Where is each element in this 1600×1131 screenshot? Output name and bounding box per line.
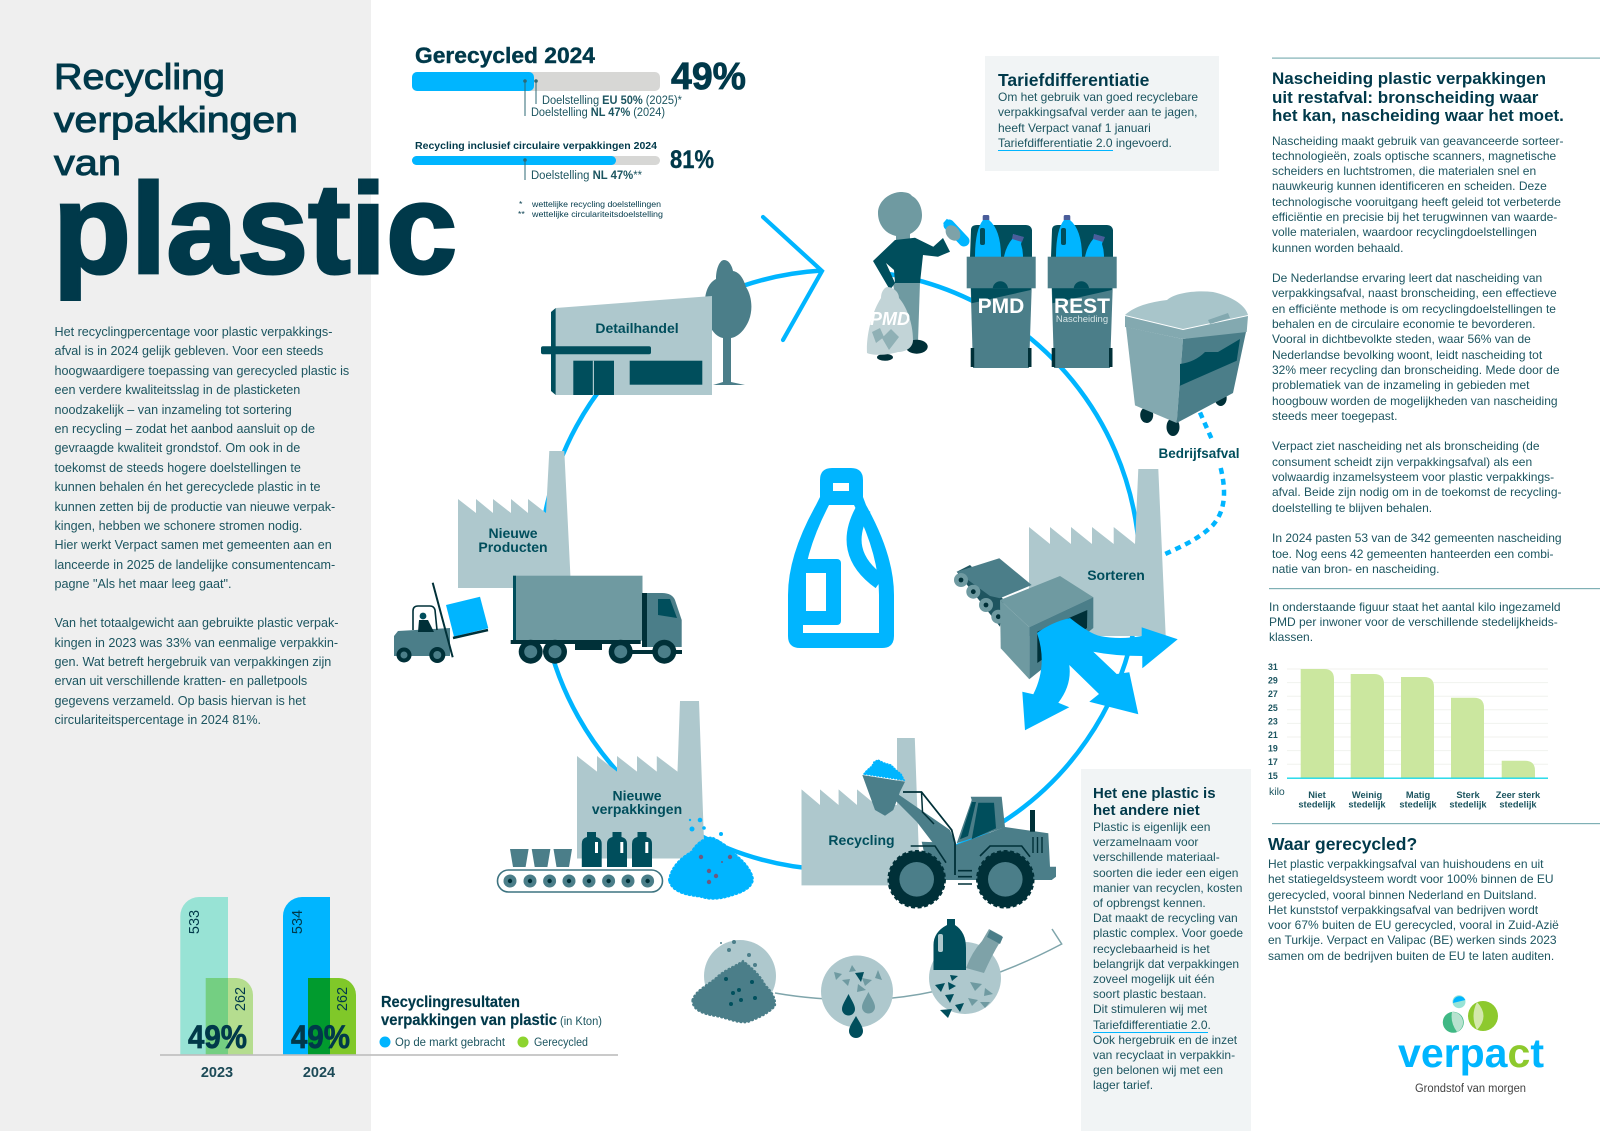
text block: nascheiding: scheiders en luchtstromen, die materialen snel en xyxy=(1272,164,1536,178)
chart: PMD per inwoner: 23 xyxy=(1268,716,1278,726)
text block: intro left column: kunnen zetten bij de productie van nieuwe verpak- xyxy=(54,500,335,514)
illustration: sorteren factory: Sorteren xyxy=(1087,567,1145,583)
illustration: conveyor with packaging xyxy=(498,832,662,892)
text block: het ene plastic: Dat maakt de recycling van xyxy=(1093,911,1238,925)
gauge: gerecycled 2024: 49% xyxy=(671,56,746,98)
footnotes: wettelijke recycling doelstellingen xyxy=(531,199,661,209)
text block: nascheiding: verpakkingsafval, naast bronscheiding, een effectieve xyxy=(1272,286,1557,300)
text block: het ene plastic: verschillende materiaal- xyxy=(1093,850,1220,864)
icon: central bottle xyxy=(788,468,894,648)
bottle in hand xyxy=(945,221,951,226)
text block: nascheiding: behalen en de circulaire economie te bevorderen. xyxy=(1272,317,1536,331)
title: Recycling xyxy=(54,56,225,97)
heading: waar gerecycled: Waar gerecycled? xyxy=(1268,834,1417,854)
text block: tariefdifferentiatie: heeft Verpact vanaf 1 januari xyxy=(998,121,1151,135)
text block: nascheiding: technologische vooruitgang heeft geleid tot verbeterde xyxy=(1272,195,1561,209)
label: bedrijfsafval: Bedrijfsafval xyxy=(1158,446,1240,461)
chart title and legend: Recyclingresultaten xyxy=(381,994,520,1011)
text block: intro left column: Het recyclingpercentage voor plastic verpakkings- xyxy=(54,325,332,339)
recycling loop ring xyxy=(540,270,1140,870)
illustration: REST bin xyxy=(1048,215,1117,368)
illustration: company container xyxy=(1125,291,1248,436)
chart: PMD per inwoner: Matig xyxy=(1406,790,1430,800)
text block: nascheiding: en efficiënte methode is om recyclingdoelstellingen te xyxy=(1272,302,1556,316)
text block: nascheiding: Nederlandse bevolking woont, leidt nascheiding tot xyxy=(1272,348,1542,362)
chart: PMD per inwoner: 19 xyxy=(1268,744,1278,754)
text block: figuur intro: PMD per inwoner voor de verschillende stedelijkheids- xyxy=(1269,615,1558,629)
title xyxy=(53,56,457,301)
text block: het ene plastic: lager tarief. xyxy=(1093,1078,1153,1092)
gauge: recycling inclusief circulaire verpakkingen xyxy=(412,140,714,182)
person legs xyxy=(893,282,920,346)
text block: het ene plastic: Tariefdifferentiatie 2.0. xyxy=(1093,1018,1211,1032)
text block: het ene plastic: soorten die ieder een eigen xyxy=(1093,866,1238,880)
text block: nascheiding: Vooral in dichtbevolkte steden, waar 56% van de xyxy=(1272,332,1531,346)
text block: tariefdifferentiatie xyxy=(998,90,1198,151)
text block: nascheiding: 32% meer recycling dan bronscheiding. Mede door de xyxy=(1272,363,1560,377)
text block: intro left column: een verdere kwaliteitsslag in de plasticketen xyxy=(54,383,300,397)
illustration: REST bin: Nascheiding xyxy=(1056,314,1108,325)
illustration: forklift xyxy=(394,583,488,663)
chart: recycling results bars: 2024 xyxy=(303,1065,335,1081)
text block: nascheiding xyxy=(1272,134,1564,576)
text block: nascheiding: hoogbouw worden de mogelijkheden van nascheiding xyxy=(1272,394,1558,408)
loader bucket xyxy=(862,775,905,816)
chart: PMD per inwoner: 25 xyxy=(1268,703,1278,713)
text block: nascheiding: problematiek van de inzameling in gebieden met xyxy=(1272,378,1530,392)
rule: right column middle xyxy=(1269,588,1600,589)
logo: verpact: Grondstof van morgen xyxy=(1415,1083,1526,1095)
chart: PMD per inwoner: Weinig xyxy=(1352,790,1382,800)
heading: nascheiding: uit restafval: bronscheiding waar xyxy=(1272,88,1538,106)
gauge: recycling inclusief circulaire verpakkingen: 81% xyxy=(670,146,714,174)
chart: recycling results bars: 533 xyxy=(187,910,203,934)
text block: nascheiding: Verpact ziet nascheiding net als bronscheiding (de xyxy=(1272,439,1540,453)
gauge: gerecycled 2024: Doelstelling NL 47% (2024) xyxy=(531,107,665,119)
chart: PMD per inwoner: stedelijk xyxy=(1499,800,1537,810)
text block: tariefdifferentiatie: Om het gebruik van goed recyclebare xyxy=(998,90,1198,104)
illustration: nieuwe verpakkingen factory: verpakkingen xyxy=(592,801,682,817)
text block: nascheiding: volwaardig inzamelsysteem voor plastic verpakkings- xyxy=(1272,470,1554,484)
text block: intro left column: ervan uit verschillende kratten- en palletpools xyxy=(54,674,307,688)
arrow: dashed bedrijfsafval line xyxy=(1163,412,1224,555)
chart: recycling results bars: 49% xyxy=(291,1019,350,1055)
chart: PMD per inwoner: stedelijk xyxy=(1298,800,1336,810)
chart: PMD per inwoner: Zeer sterk xyxy=(1496,790,1541,800)
heading: het ene plastic: Het ene plastic is xyxy=(1093,785,1216,802)
text block: nascheiding: technologieën, zoals optische scanners, magnetische xyxy=(1272,149,1556,163)
loader wheels xyxy=(889,851,945,907)
illustration: PMD bin xyxy=(967,215,1036,368)
text block: nascheiding: De Nederlandse ervaring leert dat nascheiding van xyxy=(1272,271,1542,285)
text block: het ene plastic: zoveel mogelijk uit één xyxy=(1093,972,1214,986)
chart: PMD per inwoner xyxy=(1268,662,1548,810)
text block: tariefdifferentiatie: verpakkingsafval verder aan te jagen, xyxy=(998,105,1197,119)
illustration: person with bag: PMD xyxy=(870,309,910,329)
heading: nascheiding: het kan, nascheiding waar het moet. xyxy=(1272,106,1564,125)
text block: intro left column: gegevens verzameld. Op basis hiervan is het xyxy=(54,694,306,708)
chart: recycling results bars xyxy=(160,897,618,1081)
chart: PMD per inwoner: 21 xyxy=(1268,730,1278,740)
text block: nascheiding: doelstelling te blijven behalen. xyxy=(1272,501,1432,515)
footnotes: * xyxy=(519,199,523,209)
text block: waar gerecycled xyxy=(1268,857,1559,963)
text block: waar gerecycled: gerecycled, vooral binnen Nederland en Duitsland. xyxy=(1268,888,1537,902)
text block: figuur intro xyxy=(1269,600,1561,644)
text block: het ene plastic: Plastic is eigenlijk een xyxy=(1093,820,1210,834)
heading: tariefdifferentiatie: Tariefdifferentiatie xyxy=(998,70,1149,90)
illustration: detailhandel shop: Detailhandel xyxy=(595,320,679,336)
footnotes: ** xyxy=(518,209,525,219)
text block: intro left column: kingen in 2023 was 33% van eenmalige verpakkin- xyxy=(54,636,338,650)
text block: intro left column: afval is in 2024 gelijk gebleven. Voor een steeds xyxy=(54,344,323,358)
text block: tariefdifferentiatie: Tariefdifferentiatie 2.0 ingevoerd. xyxy=(998,136,1172,150)
text block: intro left column: pagne "Als het maar leeg gaat". xyxy=(54,577,231,591)
text block: het ene plastic: plastic complex. Voor goede xyxy=(1093,926,1243,940)
text block: het ene plastic: soort plastic bestaan. xyxy=(1093,987,1206,1001)
chart: PMD per inwoner: 27 xyxy=(1268,689,1278,699)
chart: recycling results bars: 262 xyxy=(335,987,351,1011)
arrow: loop arrowhead xyxy=(763,217,822,340)
text block: het ene plastic: Ook hergebruik en de inzet xyxy=(1093,1033,1237,1047)
text block: nascheiding: volle materialen, waardoor recyclingdoelstellingen xyxy=(1272,225,1537,239)
loader cab xyxy=(957,797,1005,843)
connector line under recycling xyxy=(775,929,1062,1000)
text block: het ene plastic: belangrijk dat verpakkingen xyxy=(1093,957,1239,971)
chart title and legend: Gerecycled xyxy=(534,1037,588,1049)
text block: waar gerecycled: het statiegeldsysteem wordt voor 100% binnen de EU xyxy=(1268,872,1554,886)
chart: PMD per inwoner: stedelijk xyxy=(1348,800,1386,810)
text block: intro left column: noodzakelijk – van inzameling tot sortering xyxy=(54,403,292,417)
chart: recycling results bars: 262 xyxy=(233,987,249,1011)
gauge: recycling inclusief circulaire verpakkingen: Doelstelling NL 47%** xyxy=(531,170,643,182)
shop building xyxy=(556,296,712,395)
chart: PMD per inwoner: stedelijk xyxy=(1449,800,1487,810)
loader arm xyxy=(895,793,955,873)
chart title and legend: (in Kton) xyxy=(560,1016,602,1028)
text block: intro left column: kunnen behalen én het gerecyclede plastic in te xyxy=(54,480,321,494)
text block: nascheiding: efficiëntie en precisie bij het terugwinnen van waarde- xyxy=(1272,210,1557,224)
text block: het ene plastic: recyclebaarheid is het xyxy=(1093,942,1210,956)
text block: intro left column: kingen, hebben we schonere stromen nodig. xyxy=(54,519,302,533)
text block: het ene plastic: van recyclaat in verpakkin- xyxy=(1093,1048,1235,1062)
illustration: nieuwe verpakkingen factory xyxy=(577,701,705,858)
text block: het ene plastic: manier van recyclen, kosten xyxy=(1093,881,1242,895)
text block: nascheiding: natie van bron- en nascheiding. xyxy=(1272,562,1439,576)
text block: waar gerecycled: Het kunststof verpakkingsafval van bedrijven wordt xyxy=(1268,903,1538,917)
chart: PMD per inwoner: stedelijk xyxy=(1399,800,1437,810)
chart title and legend: Op de markt gebracht xyxy=(395,1037,506,1049)
person head xyxy=(878,192,922,242)
text block: waar gerecycled: en Turkije. Verpact en Valipac (BE) werken sinds 2023 xyxy=(1268,933,1557,947)
text block: nascheiding: toe. Nog eens 42 gemeenten hanteerden een combi- xyxy=(1272,547,1554,561)
text block: het ene plastic: of opbrengst kennen. xyxy=(1093,896,1206,910)
icon: tree xyxy=(705,260,751,385)
chart title and legend xyxy=(380,994,602,1049)
icon: granulate circle xyxy=(692,940,776,1022)
text block: intro left column: Hier werkt Verpact samen met gemeenten aan en xyxy=(54,538,332,552)
text block: waar gerecycled: voor 67% buiten de EU gerecycled, vooral in Zuid-Azië xyxy=(1268,918,1559,932)
text block: nascheiding: nauwkeurig kunnen identificeren en scheiden. Deze xyxy=(1272,179,1547,193)
text block: figuur intro: klassen. xyxy=(1269,630,1313,644)
plastic bag xyxy=(867,287,913,355)
illustration: blue granulate pile xyxy=(670,818,752,898)
text block: intro left column: gevraagde kwaliteit grondstof. Om ook in de xyxy=(54,441,300,455)
gauge: gerecycled 2024: Doelstelling EU 50% (2025)* xyxy=(542,95,682,107)
text block: nascheiding: Nascheiding maakt gebruik van geavanceerde sorteer- xyxy=(1272,134,1564,148)
text block: het ene plastic: verzamelnaam voor xyxy=(1093,835,1198,849)
chart: PMD per inwoner: 29 xyxy=(1268,676,1278,686)
illustration: recycling factory xyxy=(802,738,920,885)
text block: het ene plastic xyxy=(1093,820,1243,1092)
chart: recycling results bars: 534 xyxy=(290,910,306,934)
panel: left grey column xyxy=(0,0,371,1131)
logo: verpact xyxy=(1398,995,1544,1095)
footnotes: wettelijke circulariteitsdoelstelling xyxy=(531,209,663,219)
text block: intro left column xyxy=(54,325,349,727)
rule: right column top xyxy=(1272,58,1600,59)
person torso xyxy=(873,238,950,290)
illustration: nieuwe producten factory: Producten xyxy=(478,539,548,555)
text block: nascheiding: afval. Beide zijn nodig om in de toekomst de recycling- xyxy=(1272,485,1561,499)
loader body xyxy=(956,827,1056,880)
text block: nascheiding: In 2024 pasten 53 van de 342 gemeenten nascheiding xyxy=(1272,531,1562,545)
panel: tariefdifferentiatie background xyxy=(985,56,1219,171)
chart: PMD per inwoner: 17 xyxy=(1268,757,1278,767)
illustration: recycling factory: Recycling xyxy=(828,832,895,848)
illustration: REST bin: REST xyxy=(1054,295,1110,318)
panel: het ene plastic background xyxy=(1081,769,1251,1131)
heading: het ene plastic xyxy=(1093,785,1216,818)
text block: intro left column: circulariteitspercentage in 2024 81%. xyxy=(54,713,261,727)
illustration: sorteren factory xyxy=(1029,469,1166,636)
chart: PMD per inwoner: 31 xyxy=(1268,662,1278,672)
text block: intro left column: Van het totaalgewicht aan gebruikte plastic verpak- xyxy=(54,616,338,630)
gauge: gerecycled 2024: Gerecycled 2024 xyxy=(415,43,596,68)
chart: PMD per inwoner: Sterk xyxy=(1456,790,1480,800)
chart: PMD per inwoner: kilo xyxy=(1269,786,1285,798)
text block: intro left column: gen. Wat betreft hergebruik van verpakkingen zijn xyxy=(54,655,331,669)
chart: PMD per inwoner: Niet xyxy=(1308,790,1326,800)
heading: nascheiding: Nascheiding plastic verpakkingen xyxy=(1272,69,1546,88)
text block: nascheiding: consument scheidt zijn verpakkingsafval) als een xyxy=(1272,455,1532,469)
icon: shredded bottles circle xyxy=(929,919,1003,1018)
text block: het ene plastic: Dit stimuleren wij met xyxy=(1093,1002,1207,1016)
heading: het ene plastic: het andere niet xyxy=(1093,802,1200,818)
gauge: recycling inclusief circulaire verpakkingen: Recycling inclusief circulaire verpakkingen 2024 xyxy=(415,140,657,152)
chart title and legend: verpakkingen van plastic xyxy=(381,1012,557,1029)
chart: recycling results bars: 2023 xyxy=(201,1065,233,1081)
text block: intro left column: en recycling – zodat het aanbod aansluit op de xyxy=(54,422,315,436)
illustration: wheel loader xyxy=(862,760,1056,907)
heading: nascheiding xyxy=(1272,69,1564,125)
text block: intro left column: hoogwaardigere toepassing van gerecycled plastic is xyxy=(54,364,349,378)
title: verpakkingen xyxy=(54,99,298,140)
illustration: detailhandel shop xyxy=(541,260,751,395)
text block: figuur intro: In onderstaande figuur staat het aantal kilo ingezameld xyxy=(1269,600,1561,614)
text block: het ene plastic: gen belonen wij met een xyxy=(1093,1063,1223,1077)
illustration: sorting machine xyxy=(954,558,1093,679)
gauge: gerecycled 2024 xyxy=(412,43,746,119)
text block: intro left column: toekomst de steeds hogere doelstellingen te xyxy=(54,461,301,475)
chart: recycling results bars: 49% xyxy=(188,1019,247,1055)
title: van xyxy=(54,142,121,183)
illustration: nieuwe producten factory xyxy=(458,451,571,588)
text block: nascheiding: steeds meer toegepast. xyxy=(1272,409,1397,423)
icon: melting flakes circle xyxy=(821,956,893,1038)
logo: verpact: verpact xyxy=(1398,1030,1544,1076)
footnotes xyxy=(518,199,663,219)
illustration: nieuwe producten factory: Nieuwe xyxy=(488,525,538,541)
illustration: person with bag xyxy=(867,192,964,361)
text block: waar gerecycled: samen om de bedrijven buiten de EU te laten auditen. xyxy=(1268,949,1554,963)
title: plastic xyxy=(53,158,457,301)
text block: intro left column: lanceerde in 2025 de landelijke consumentencam- xyxy=(54,558,335,572)
text block: waar gerecycled: Het plastic verpakkingsafval van huishoudens en uit xyxy=(1268,857,1544,871)
illustration: nieuwe verpakkingen factory: Nieuwe xyxy=(612,788,662,804)
text block: nascheiding: kunnen worden behaald. xyxy=(1272,241,1403,255)
rule: right column lower xyxy=(1272,823,1600,824)
illustration: PMD bin: PMD xyxy=(978,295,1024,318)
illustration: truck xyxy=(511,576,682,664)
chart: PMD per inwoner: 15 xyxy=(1268,771,1278,781)
arrows: blue sorted streams xyxy=(1022,618,1178,730)
